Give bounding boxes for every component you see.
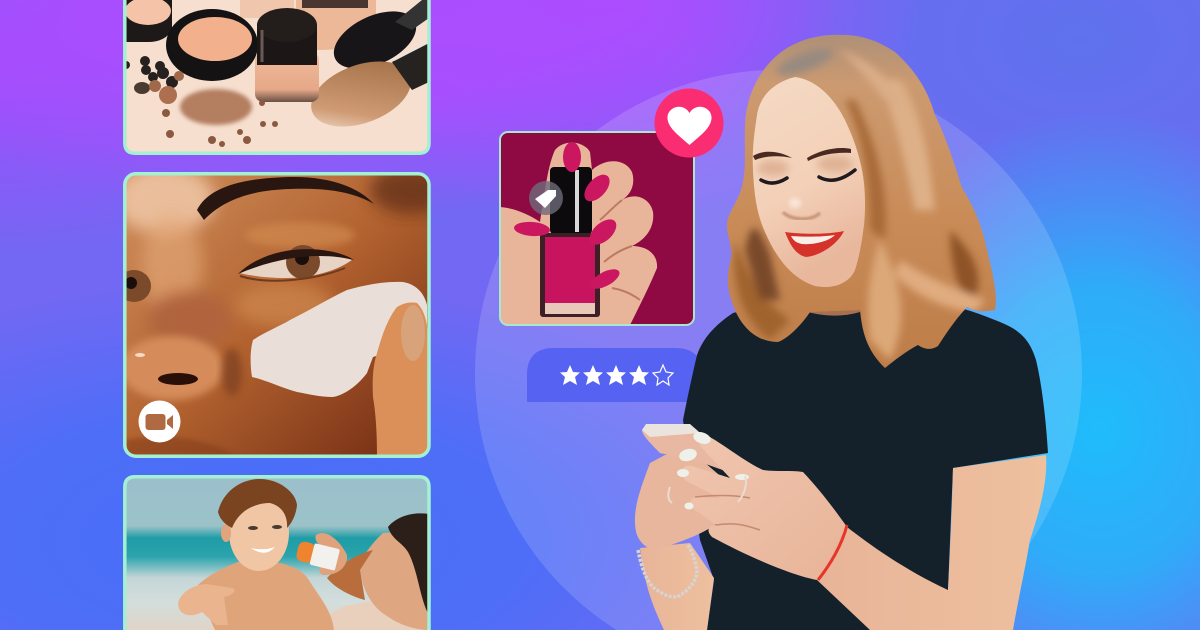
nails bbox=[514, 142, 622, 293]
panel: beach bbox=[125, 477, 429, 630]
icon: price tag bbox=[529, 181, 563, 215]
panel: nail polish bbox=[500, 132, 694, 325]
bottle cap bbox=[550, 167, 592, 234]
panel border: makeup bbox=[125, 0, 429, 153]
temple shade bbox=[362, 176, 428, 222]
eyebrow bbox=[197, 177, 374, 220]
eyeshadow bbox=[757, 156, 853, 176]
sunscreen bbox=[295, 539, 340, 571]
panel: makeup products bbox=[122, 0, 429, 153]
finger shading bbox=[695, 496, 760, 530]
baby torso bbox=[198, 560, 334, 630]
nose bbox=[783, 198, 820, 219]
neck bbox=[800, 280, 860, 316]
large translucent circle bbox=[475, 70, 1082, 630]
panel: skincare closeup bbox=[126, 176, 428, 454]
nose bbox=[120, 336, 242, 400]
cream bbox=[251, 282, 427, 397]
face bbox=[753, 77, 865, 287]
nose bridge bbox=[142, 215, 202, 315]
right hand bbox=[682, 433, 847, 580]
main eye bbox=[238, 245, 354, 281]
baby hair bbox=[218, 479, 297, 528]
black brush bbox=[334, 0, 428, 68]
hero illustration bbox=[123, 0, 1082, 630]
hand bbox=[500, 143, 657, 325]
mouth bbox=[785, 231, 844, 257]
finger bbox=[373, 302, 428, 456]
mother's arm bbox=[327, 550, 373, 600]
lip shadow bbox=[126, 436, 230, 454]
finger creases bbox=[600, 200, 640, 300]
woman bbox=[635, 35, 1048, 630]
eyes bbox=[248, 525, 282, 530]
baby arm bbox=[178, 584, 234, 625]
right upper arm and forearm bbox=[817, 455, 1046, 630]
panel border: beach bbox=[125, 477, 429, 630]
bracelet bbox=[638, 545, 697, 597]
back jars bbox=[240, 0, 376, 50]
stars bbox=[560, 365, 673, 385]
eyelid light bbox=[245, 222, 355, 248]
rating bubble bbox=[527, 348, 702, 402]
mother bbox=[360, 513, 429, 630]
phone bbox=[642, 424, 731, 473]
mother's hand bbox=[315, 533, 347, 575]
forehead highlight bbox=[115, 166, 215, 234]
left hand bbox=[635, 450, 725, 549]
foundation bottle bbox=[255, 8, 319, 102]
left forearm bbox=[640, 543, 714, 630]
baby bbox=[178, 479, 334, 630]
rings bbox=[668, 476, 746, 503]
icon: heart badge bbox=[654, 88, 724, 158]
hair strands bbox=[734, 43, 985, 360]
blush compact bbox=[166, 9, 258, 81]
eyes bbox=[761, 170, 855, 183]
panel border: skincare bbox=[125, 174, 429, 456]
red bracelet bbox=[818, 525, 847, 580]
black shirt bbox=[683, 300, 1048, 630]
tan brush bbox=[311, 42, 428, 126]
icon: video camera bbox=[138, 400, 180, 442]
baby head bbox=[230, 503, 289, 571]
eyebrows bbox=[753, 148, 851, 161]
cosmetic powder bbox=[162, 89, 278, 147]
fingernails bbox=[677, 430, 749, 510]
sand bbox=[330, 601, 422, 630]
under-eye light bbox=[235, 283, 335, 327]
second eye bbox=[126, 270, 151, 302]
freckled cheek bbox=[148, 285, 217, 334]
smile bbox=[251, 547, 275, 553]
hair bbox=[727, 35, 996, 368]
dark beads bbox=[122, 56, 184, 104]
bottle body bbox=[540, 233, 600, 317]
small compact bbox=[125, 0, 172, 42]
